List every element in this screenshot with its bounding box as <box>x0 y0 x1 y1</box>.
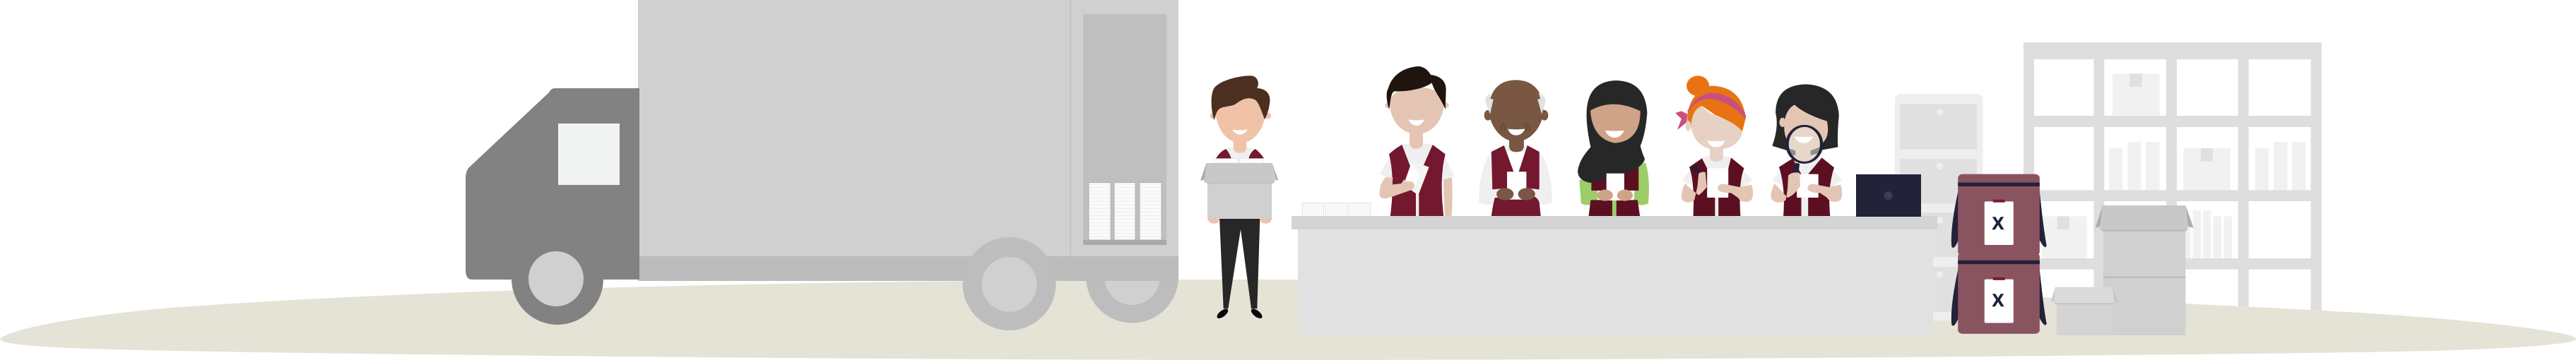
cab window <box>558 124 620 185</box>
rear wheel <box>1086 230 1178 323</box>
rear door opening with stacks <box>1083 14 1166 245</box>
shelving unit <box>2023 42 2322 341</box>
red stacked crates <box>1951 174 2047 334</box>
laptop <box>1856 174 1921 217</box>
truck <box>466 0 1178 330</box>
counter <box>1292 216 1937 335</box>
front wheel <box>512 233 603 325</box>
cab <box>466 88 639 280</box>
chassis band <box>638 256 1178 281</box>
door line <box>1070 0 1071 281</box>
staff member with paper <box>1380 66 1455 219</box>
paper stacks on counter <box>1302 203 1371 217</box>
filing cabinet <box>1895 94 1983 320</box>
staff member with magnifying glass <box>1771 84 1843 219</box>
cargo body <box>638 0 1178 281</box>
middle wheel <box>962 237 1056 330</box>
large open box <box>2096 205 2194 335</box>
crate label bottom: X <box>1992 291 2004 311</box>
ground ellipse <box>0 280 2576 360</box>
staff member older man <box>1479 80 1552 219</box>
crate label top: X <box>1992 214 2004 234</box>
person carrying box <box>1200 76 1278 320</box>
small open box <box>2051 287 2117 335</box>
staff member with orange hair <box>1675 76 1753 219</box>
staff member in hijab <box>1578 80 1649 219</box>
